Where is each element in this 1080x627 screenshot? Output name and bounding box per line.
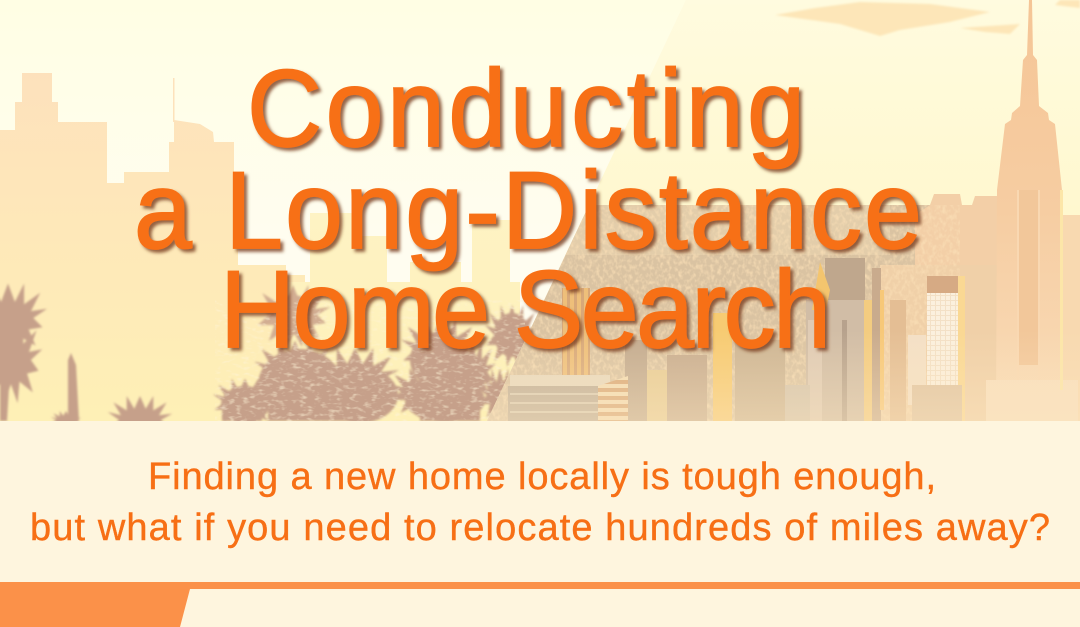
low building with stripes (508, 375, 628, 421)
panel: New York skyline background (480, 0, 1080, 421)
subtitle band (0, 421, 1080, 582)
palm highlights (215, 300, 525, 421)
central palm cluster (213, 285, 539, 427)
palm trees (0, 284, 535, 421)
midtown towers (508, 258, 965, 421)
Empire State Building (986, 0, 1078, 421)
subtitle text: Finding a new home locally is tough enough, (148, 456, 936, 498)
panel: Los Angeles skyline background (0, 0, 700, 446)
title: a Long-Distance (134, 149, 922, 272)
orange divider bar (0, 582, 1080, 627)
clouds (775, 0, 1080, 36)
distant city mass (480, 194, 1080, 421)
city grain (480, 205, 960, 421)
palm tree far left (0, 284, 47, 421)
LA midground buildings (305, 213, 520, 421)
subtitle text: but what if you need to relocate hundreds of miles away? (30, 507, 1050, 549)
LA skyline buildings (0, 73, 305, 421)
title (134, 47, 922, 371)
subtitle text (30, 456, 1050, 549)
small palm (108, 396, 172, 421)
title: Home Search (220, 248, 831, 371)
bottom haze (488, 349, 986, 421)
title: Conducting (247, 47, 805, 170)
lamp post (68, 353, 79, 421)
